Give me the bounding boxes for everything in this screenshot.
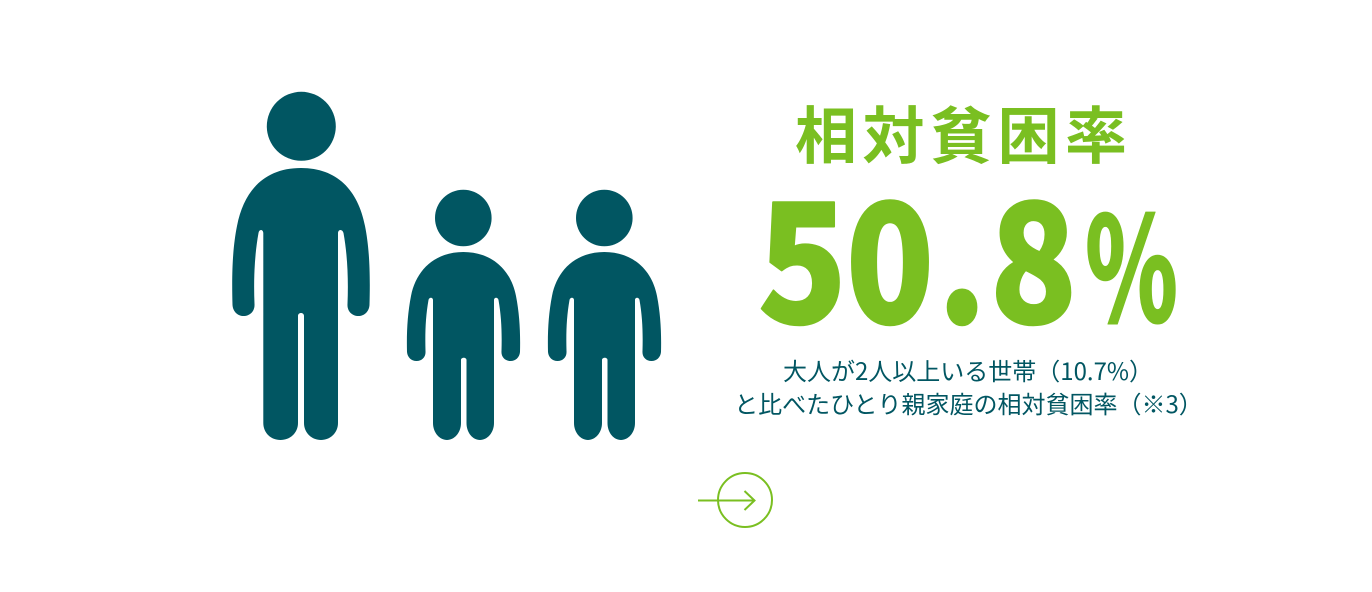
percent sign: % <box>1085 154 1178 364</box>
description text: と比べたひとり親家庭の相対貧困率（※3） <box>734 385 1203 420</box>
icon: adult figure <box>232 92 370 440</box>
big number: 50.8% <box>758 135 1178 370</box>
big number: 50.8%: 5 <box>758 135 847 370</box>
big number: 50.8%: 8 <box>990 135 1077 370</box>
big number: 50.8%: . <box>938 135 986 370</box>
icon: child figure 2 <box>548 190 661 440</box>
icon: arrow in circle <box>698 473 772 527</box>
description text <box>734 352 1203 420</box>
heading: relative poverty rate: 相対貧困率 <box>795 86 1127 176</box>
icon: child figure 1 <box>407 190 520 440</box>
description text: 大人が2人以上いる世帯（10.7%） <box>783 352 1153 387</box>
big number: 50.8%: 0 <box>846 135 934 370</box>
